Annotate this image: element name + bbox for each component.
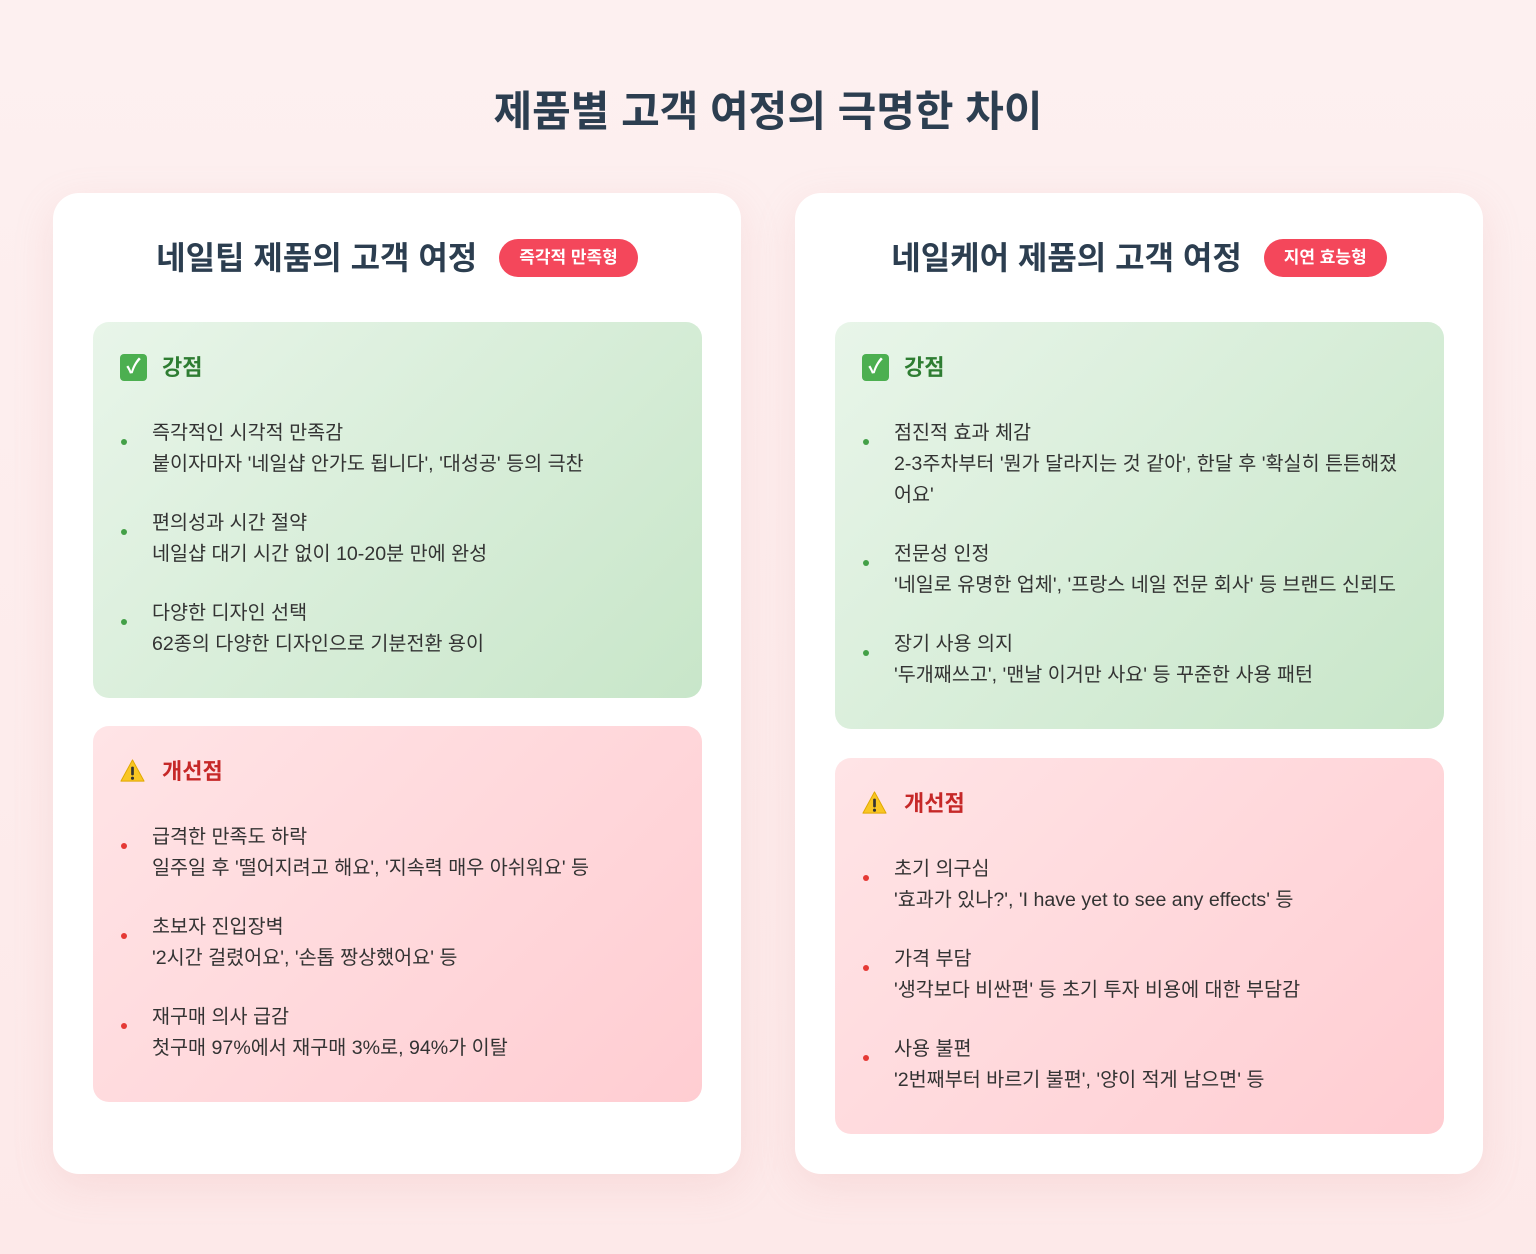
item: 초보자 진입장벽 xyxy=(152,916,284,938)
item: 일주일 후 '떨어지려고 해요', '지속력 매우 아쉬워요' 등 xyxy=(152,857,589,879)
item xyxy=(152,508,672,570)
heading: improvements: 개선점 xyxy=(162,759,223,784)
heading: strengths: 강점 xyxy=(162,355,202,380)
item xyxy=(894,1034,1414,1096)
item: 2-3주차부터 '뭔가 달라지는 것 같아', 한달 후 '확실히 튼튼해졌 xyxy=(894,453,1397,475)
item xyxy=(152,1002,672,1064)
item xyxy=(894,629,1414,691)
strengths box: nail care xyxy=(835,322,1444,729)
item: 장기 사용 의지 xyxy=(894,633,1013,655)
heading: improvements xyxy=(120,759,223,784)
improvements box: nail tip xyxy=(93,726,702,1102)
strengths box: nail care: ✓ xyxy=(868,356,883,378)
heading: improvements xyxy=(862,791,965,816)
item: 초기 의구심 xyxy=(894,858,990,880)
item: 첫구매 97%에서 재구매 3%로, 94%가 이탈 xyxy=(152,1037,508,1059)
improvements box: nail care xyxy=(835,758,1444,1134)
card heading: nail tip xyxy=(156,239,638,277)
item: '2번째부터 바르기 불편', '양이 적게 남으면' 등 xyxy=(894,1069,1264,1091)
item: 붙이자마자 '네일샵 안가도 됩니다', '대성공' 등의 극찬 xyxy=(152,453,584,475)
item: '두개째쓰고', '맨날 이거만 사요' 등 꾸준한 사용 패턴 xyxy=(894,664,1313,686)
heading: strengths xyxy=(862,354,944,381)
item: 편의성과 시간 절약 xyxy=(152,512,307,534)
item: 네일샵 대기 시간 없이 10-20분 만에 완성 xyxy=(152,543,487,565)
item: 62종의 다양한 디자인으로 기분전환 용이 xyxy=(152,633,484,655)
item xyxy=(152,598,672,660)
item xyxy=(894,944,1414,1006)
strengths box: nail tip: ✓ xyxy=(126,356,141,378)
card heading: nail tip: 네일팁 제품의 고객 여정 xyxy=(156,240,477,276)
heading: strengths: 강점 xyxy=(904,355,944,380)
item: '생각보다 비싼편' 등 초기 투자 비용에 대한 부담감 xyxy=(894,979,1300,1001)
item xyxy=(894,539,1414,601)
strengths box: nail tip xyxy=(93,322,702,698)
item: 급격한 만족도 하락 xyxy=(152,826,307,848)
item xyxy=(894,854,1414,916)
heading: strengths xyxy=(120,354,202,381)
item: 전문성 인정 xyxy=(894,543,990,565)
card heading: nail care: 네일케어 제품의 고객 여정 xyxy=(891,240,1242,276)
title: 제품별 고객 여정의 극명한 차이 xyxy=(494,88,1042,135)
card heading: nail tip: 즉각적 만족형 xyxy=(519,248,618,267)
item: '효과가 있나?', 'I have yet to see any effects' 등 xyxy=(894,889,1293,911)
panel: nail tip card xyxy=(53,193,741,1174)
item xyxy=(152,912,672,974)
card heading: nail care: 지연 효능형 xyxy=(1284,248,1367,267)
item xyxy=(894,418,1414,511)
item: 점진적 효과 체감 xyxy=(894,422,1031,444)
heading: improvements: 개선점 xyxy=(904,791,965,816)
item: '2시간 걸렸어요', '손톱 짱상했어요' 등 xyxy=(152,947,457,969)
item: 즉각적인 시각적 만족감 xyxy=(152,422,343,444)
item: 다양한 디자인 선택 xyxy=(152,602,307,624)
card heading: nail care xyxy=(891,239,1387,277)
item: 가격 부담 xyxy=(894,948,972,970)
item: 재구매 의사 급감 xyxy=(152,1006,289,1028)
item: '네일로 유명한 업체', '프랑스 네일 전문 회사' 등 브랜드 신뢰도 xyxy=(894,574,1396,596)
item: 사용 불편 xyxy=(894,1038,972,1060)
item xyxy=(152,418,672,480)
item xyxy=(152,822,672,884)
item: 어요' xyxy=(894,484,934,506)
panel: nail care card xyxy=(795,193,1483,1174)
